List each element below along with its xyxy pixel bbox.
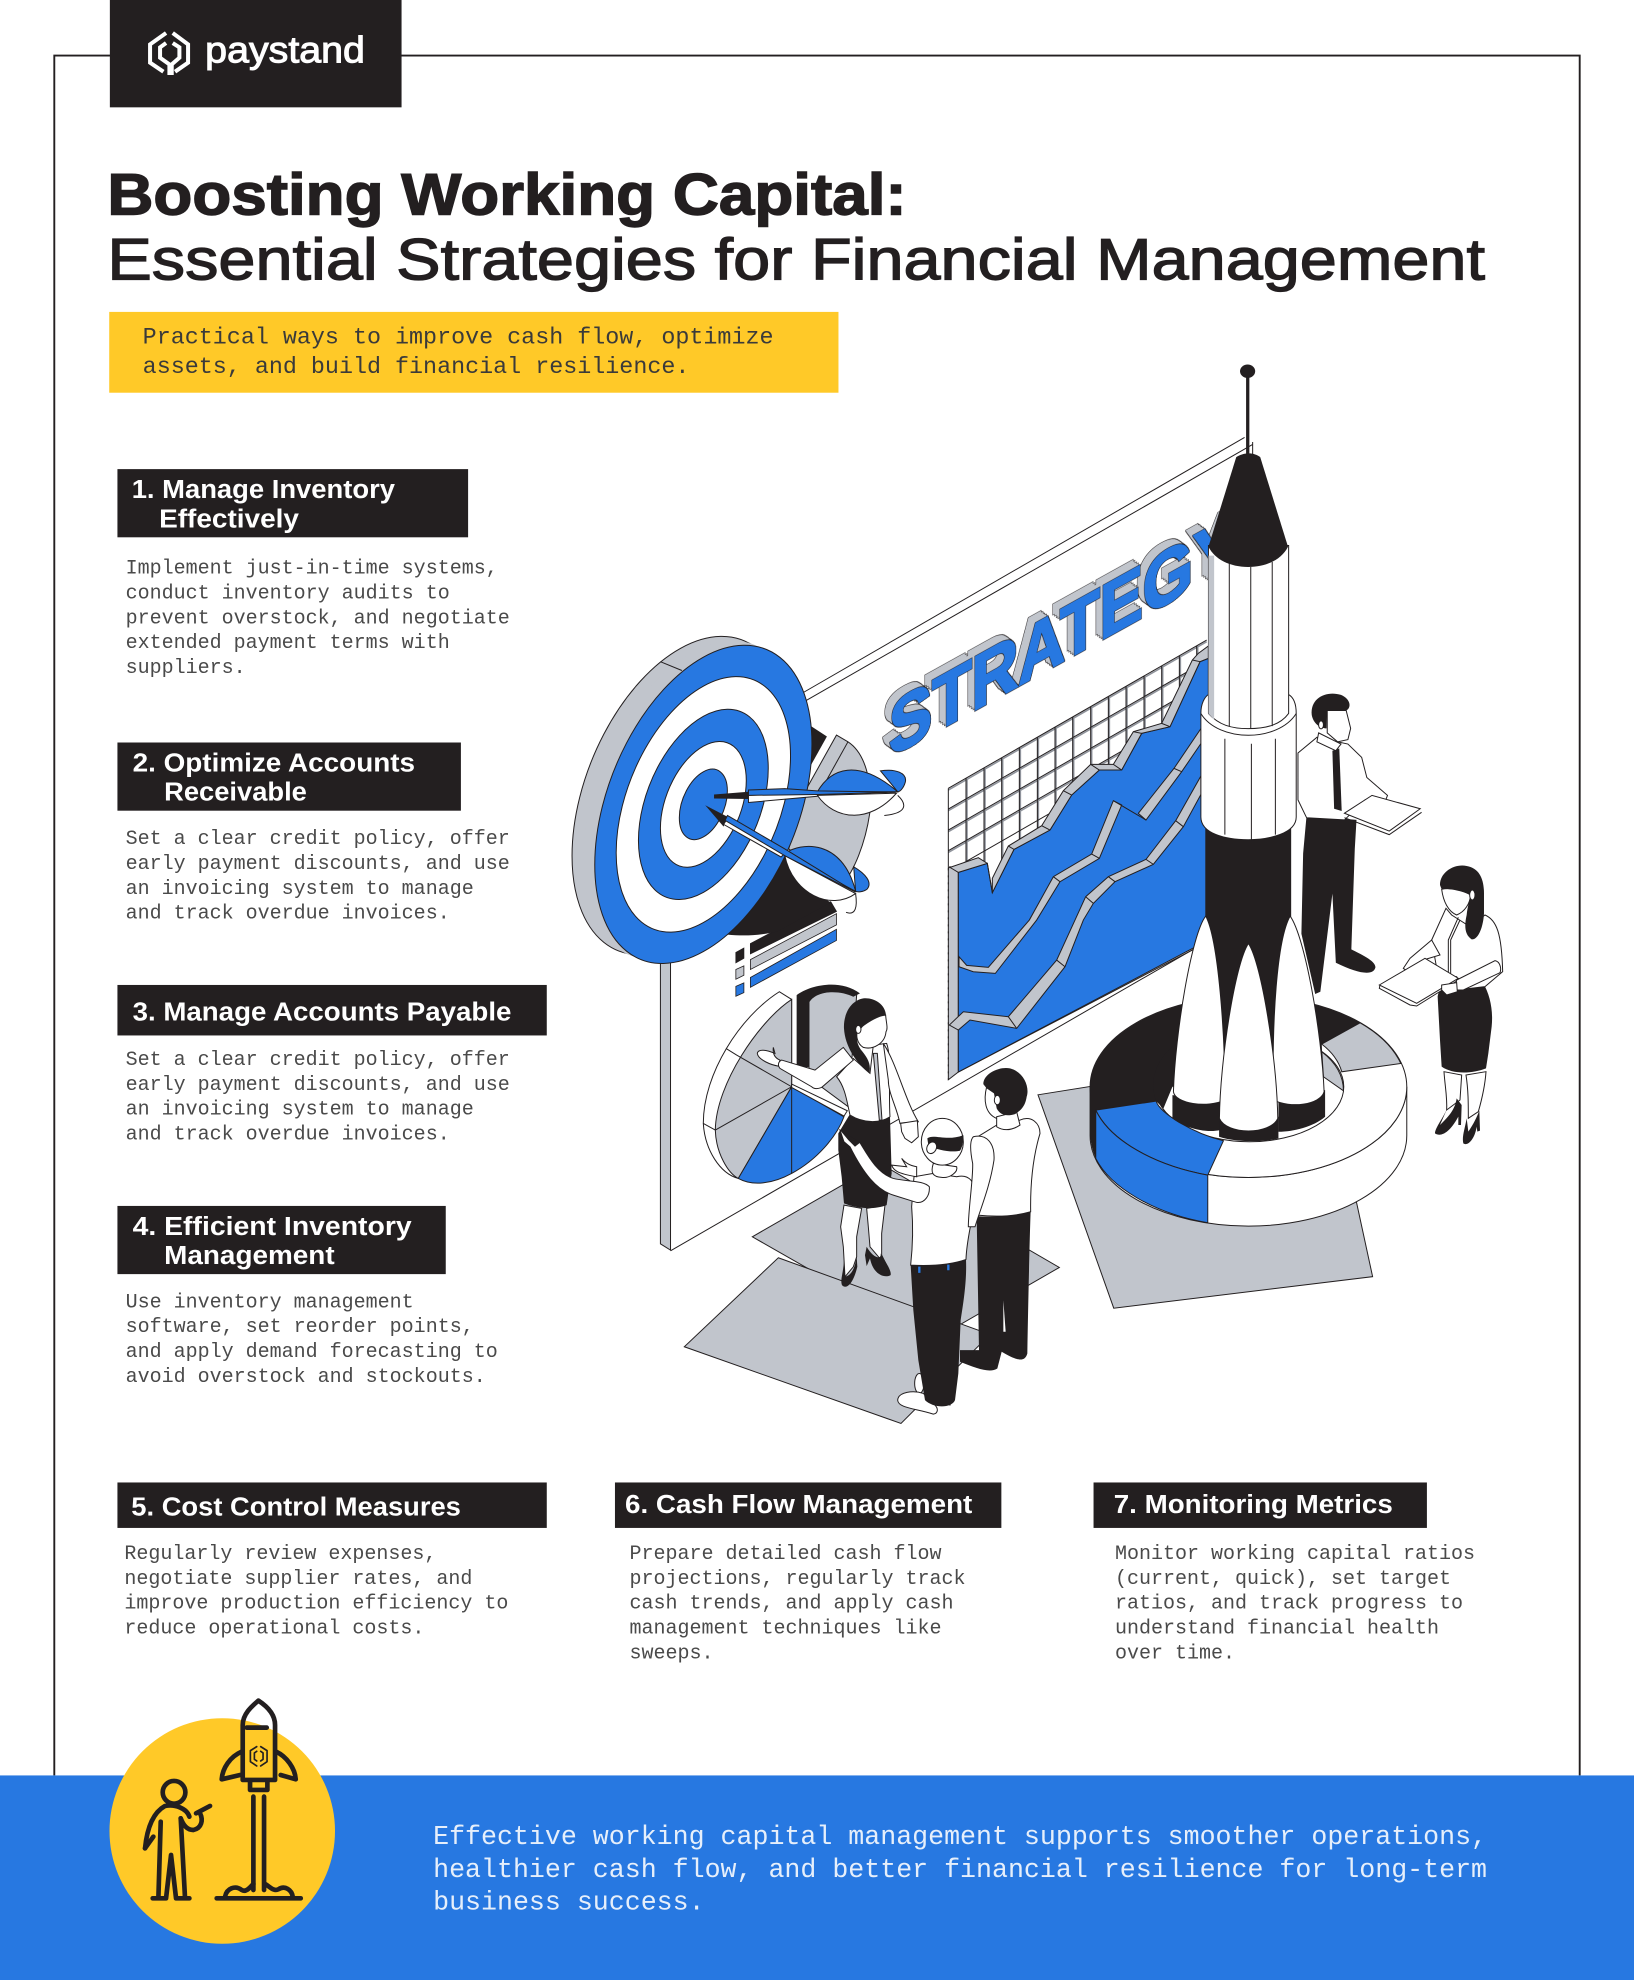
footer circle — [109, 1718, 335, 1944]
section 6: cash flow — [615, 1482, 1001, 1665]
text 2: Set a clear credit policy, offer — [126, 828, 510, 851]
ring: blue side sector — [1096, 1110, 1208, 1223]
heading 5 — [117, 1482, 547, 1528]
text 4: and apply demand forecasting to — [126, 1341, 498, 1364]
ring: inner hole — [1153, 1025, 1344, 1142]
woman with folder on the right — [1379, 865, 1503, 1144]
heading 6: 6. Cash Flow Management — [625, 1491, 973, 1519]
text 5: negotiate supplier rates, and — [124, 1568, 472, 1591]
text 1: suppliers. — [126, 657, 246, 680]
text 5: reduce operational costs. — [124, 1617, 424, 1640]
footer message: healthier cash flow, and better financial resilience for long-term — [433, 1855, 1487, 1885]
blue area chart — [948, 646, 1208, 1080]
3D word: STRATEGY: STRATEGY — [889, 497, 1236, 774]
legend bars — [736, 902, 836, 996]
section 4: inventory management — [117, 1206, 498, 1389]
ring: grey sector — [1322, 1023, 1401, 1072]
illustration: strategy scene — [572, 365, 1503, 1423]
chart grid — [948, 640, 1207, 892]
section 3: accounts payable — [117, 985, 547, 1146]
icon: rocket — [217, 1701, 301, 1898]
heading 3: 3. Manage Accounts Payable — [133, 998, 511, 1026]
man in the middle seen from behind — [840, 1118, 975, 1414]
chart line: lower band — [949, 772, 1203, 1030]
icon: paystand hexagon mark — [150, 33, 188, 75]
heading 1: Effectively — [159, 505, 300, 533]
text 7: ratios, and track progress to — [1115, 1593, 1463, 1616]
text 7: understand financial health — [1115, 1617, 1439, 1640]
logo wordmark: paystand — [205, 29, 365, 71]
title: Boosting Working Capital: — [107, 162, 907, 227]
text 1: extended payment terms with — [126, 632, 450, 655]
text 6: Prepare detailed cash flow — [629, 1543, 942, 1566]
strategy board outline — [660, 437, 1253, 1251]
subtitle callout: Practical ways to improve cash flow, optimize — [143, 326, 774, 352]
text 6: sweeps. — [629, 1642, 713, 1665]
floor sheet under rocket — [1038, 1049, 1373, 1308]
text 3: early payment discounts, and use — [126, 1074, 510, 1097]
man with folder behind rocket — [1298, 694, 1422, 994]
ring platform — [1090, 996, 1407, 1226]
chart line: top band — [950, 646, 1208, 893]
rocket lower body — [1205, 821, 1291, 1035]
footer message: business success. — [433, 1888, 705, 1918]
heading 3 — [117, 985, 547, 1035]
rocket collar — [1201, 695, 1296, 840]
subtitle callout — [109, 312, 838, 393]
chart base band — [958, 942, 1208, 1072]
heading 2: 2. Optimize Accounts — [133, 750, 415, 778]
footer band — [0, 1775, 1634, 1980]
heading 4: 4. Efficient Inventory — [133, 1213, 412, 1241]
presenter woman — [757, 998, 918, 1287]
section 2: accounts receivable — [117, 743, 510, 926]
text 6: management techniques like — [629, 1617, 942, 1640]
rocket — [1172, 365, 1325, 1141]
heading 1 — [117, 469, 468, 537]
text 6: projections, regularly track — [629, 1568, 966, 1591]
text 7: over time. — [1115, 1642, 1235, 1665]
rocket antenna — [1240, 365, 1255, 460]
rocket boosters — [1172, 916, 1325, 1141]
text 1: Implement just-in-time systems, — [126, 558, 498, 581]
section 1: manage inventory — [117, 469, 510, 680]
pie chart and presenters — [703, 985, 1040, 1414]
ring: black sector — [1090, 996, 1360, 1158]
title — [107, 162, 1485, 293]
text 4: software, set reorder points, — [126, 1316, 474, 1339]
heading 4: Management — [164, 1242, 335, 1270]
text 4: avoid overstock and stockouts. — [126, 1366, 486, 1389]
heading 2 — [117, 743, 461, 811]
logo block — [110, 0, 402, 107]
heading 4 — [117, 1206, 446, 1274]
rocket nose cone — [1208, 453, 1288, 567]
text 7: (current, quick), set target — [1115, 1568, 1451, 1591]
text 5: Regularly review expenses, — [124, 1543, 436, 1566]
text 3: Set a clear credit policy, offer — [126, 1049, 510, 1072]
text 3: and track overdue invoices. — [126, 1123, 450, 1146]
dark and grey discs behind target — [727, 724, 870, 935]
dart one — [714, 770, 906, 815]
heading 2: Receivable — [164, 779, 307, 807]
text 3: an invoicing system to manage — [126, 1099, 474, 1122]
darts — [705, 770, 906, 913]
floor sheets under presenters — [684, 1163, 1059, 1423]
rocket upper body — [1208, 546, 1289, 729]
footer message: Effective working capital management supports smoother operations, — [433, 1822, 1487, 1852]
text 6: cash trends, and apply cash — [629, 1593, 954, 1616]
dart two — [705, 805, 869, 913]
subtitle callout: assets, and build financial resilience. — [143, 355, 689, 381]
heading 6 — [615, 1482, 1001, 1528]
text 7: Monitor working capital ratios — [1115, 1543, 1475, 1566]
text 4: Use inventory management — [126, 1291, 414, 1314]
text 5: improve production efficiency to — [124, 1593, 508, 1616]
icon: person — [145, 1781, 210, 1898]
text 2: early payment discounts, and use — [126, 853, 510, 876]
section 7: monitoring metrics — [1094, 1482, 1475, 1665]
text 2: and track overdue invoices. — [126, 903, 450, 926]
heading 5: 5. Cost Control Measures — [131, 1493, 461, 1521]
text 1: prevent overstock, and negotiate — [126, 607, 510, 630]
text 1: conduct inventory audits to — [126, 582, 450, 605]
pie chart — [703, 985, 860, 1183]
ring: blue top sector — [1096, 1101, 1223, 1175]
heading 1: 1. Manage Inventory — [132, 476, 396, 504]
title: Essential Strategies for Financial Management — [107, 228, 1485, 293]
chart line: middle band — [959, 725, 1203, 973]
text 2: an invoicing system to manage — [126, 878, 474, 901]
icon: person and rocket launch — [145, 1701, 301, 1898]
target — [572, 588, 812, 1012]
section 5: cost control — [117, 1482, 547, 1640]
man on the right seen from behind — [960, 1068, 1040, 1370]
heading 7 — [1094, 1482, 1427, 1528]
heading 7: 7. Monitoring Metrics — [1114, 1491, 1393, 1519]
